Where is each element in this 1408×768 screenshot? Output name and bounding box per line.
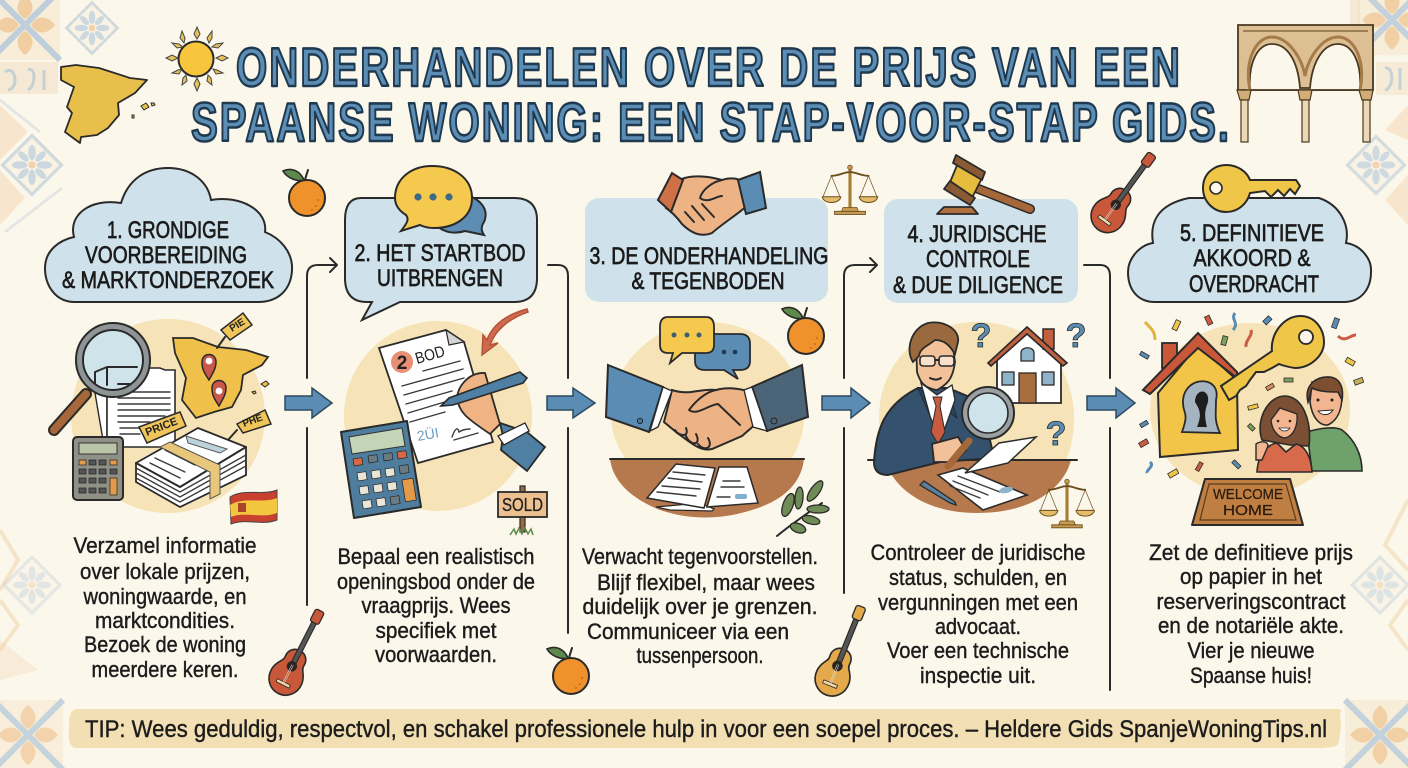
illustration: market research (54, 313, 277, 524)
offer document: 2ÜI (416, 423, 440, 444)
text: step 5 description: Vier je nieuwe (1188, 638, 1314, 663)
big key (1221, 316, 1324, 400)
handshake main (606, 365, 808, 450)
arrow connector 4 to 5 (1084, 265, 1110, 690)
cloud heading 5: OVERDRACHT (1189, 271, 1319, 298)
text: step 5 description: Zet de definitieve prijs (1149, 540, 1353, 565)
welcome mat: HOME (1223, 502, 1273, 519)
text: step 4 description: Voer een technische (887, 638, 1069, 663)
document on table (938, 468, 1027, 510)
text: step 4 description: advocaat. (935, 614, 1021, 639)
yellow house (1143, 333, 1238, 457)
arrow connector 3 to 4 (844, 258, 877, 593)
confetti (1139, 313, 1364, 478)
map with pins (173, 338, 269, 418)
icon: scales small (1040, 479, 1094, 528)
icon: orange 3 (547, 647, 589, 694)
price tags: PIE (228, 316, 248, 335)
panel: step 1 (45, 168, 292, 524)
text: step 4 description: Controleer de juridische (870, 540, 1086, 565)
question marks: ? (1046, 415, 1066, 453)
icon: guitar middle (810, 600, 877, 701)
icon: chat bubbles (395, 166, 486, 235)
icon: Spanish flag (230, 490, 277, 524)
text: step 1 description: Bezoek de woning (84, 632, 246, 657)
text: step 2 description (337, 544, 535, 667)
price tags: PRICE (144, 416, 179, 439)
title: ONDERHANDELEN OVER DE PRIJS VAN EEN (236, 37, 1180, 99)
text: step 1 description: over lokale prijzen, (80, 559, 250, 584)
text: step 5 description: reserveringscontract (1156, 589, 1346, 614)
illustration: lawyer checking (868, 322, 1077, 513)
text: step 3 description (582, 544, 818, 668)
text: step 2 description: voorwaarden. (375, 642, 497, 667)
heading block 4: CONTROLE (926, 246, 1030, 273)
cloud heading 1: & MARKTONDERZOEK (62, 267, 274, 294)
pen (920, 481, 956, 505)
tile decoration left (0, 0, 117, 768)
text: step 4 description: status, schulden, en (889, 565, 1067, 590)
text: step 4 description: vergunningen met een (878, 590, 1078, 615)
offer document: BOD (413, 343, 447, 368)
icon: Moorish arch (1237, 25, 1373, 142)
cloud heading 5: 5. DEFINITIEVE (1180, 220, 1324, 247)
cloud heading 5 (1128, 198, 1371, 302)
icon: gavel (937, 155, 1030, 214)
panel: step 4 (868, 155, 1094, 528)
tile decoration right (1345, 0, 1408, 768)
icon: map of Spain (61, 65, 155, 143)
icon: orange 1 (283, 169, 325, 216)
heading block 3: & TEGENBODEN (632, 268, 784, 295)
offer document (379, 330, 493, 463)
held paper (965, 437, 1036, 473)
sold sign (498, 486, 547, 535)
icon: olive branch (777, 479, 829, 536)
illustration: writing the offer (341, 309, 547, 535)
tip bar (69, 709, 1341, 748)
icon: key top (1203, 165, 1300, 212)
text: step 5 description (1149, 540, 1353, 688)
text: step 4 description: inspectie uit. (920, 663, 1036, 688)
speech bubble heading 2: 2. HET STARTBOD (354, 240, 526, 267)
stack of papers (136, 428, 246, 507)
question marks: ? (971, 317, 991, 355)
text: step 1 description: woningwaarde, en (83, 584, 246, 609)
arrow 1 (285, 388, 332, 418)
text: step 3 description: Verwacht tegenvoorstellen. (582, 544, 818, 569)
text: step 2 description: openingsbod onder de (337, 569, 535, 594)
icon: guitar bottom left (263, 603, 335, 701)
text: step 3 description: duidelijk over je grenzen. (582, 594, 818, 619)
couple (1256, 377, 1362, 472)
icon: scales top (822, 165, 878, 214)
text: step 2 description: Bepaal een realistisch (338, 544, 534, 569)
question marks (971, 317, 1086, 453)
icon: orange 2 (782, 307, 824, 354)
calculator blue (341, 421, 421, 518)
offer document: 2 (397, 353, 407, 374)
text: step 1 description: Verzamel informatie (74, 533, 256, 558)
text: step 4 description (870, 540, 1086, 688)
title (191, 37, 1229, 154)
sold sign: SOLD (502, 495, 543, 515)
icon: handshake top (658, 172, 766, 235)
speech bubble heading 2 (345, 198, 537, 320)
arrow 4 (1087, 388, 1135, 418)
cloud heading 1: VOORBEREIDING (85, 242, 247, 269)
contract papers (647, 464, 758, 511)
tip bar: TIP: Wees geduldig, respectvol, en schakel professionele hulp in voor een soepel proces. – Heldere Gids SpanjeWoningTips.nl (85, 716, 1327, 743)
cloud heading 1 (45, 168, 292, 302)
panel: step 2 (341, 166, 547, 535)
text: step 5 description: op papier in het (1180, 564, 1322, 589)
documents (95, 368, 175, 447)
heading block 3 (585, 198, 828, 302)
text: step 3 description: Blijf flexibel, maar wees (597, 570, 815, 595)
icon: guitar top (1084, 144, 1166, 239)
magnifier (54, 323, 150, 430)
arrow connector 1 to 2 (307, 258, 337, 605)
heading block 4: 4. JURIDISCHE (908, 221, 1046, 248)
arrow 2 (547, 388, 595, 418)
cloud heading 1: 1. GRONDIGE (107, 217, 229, 244)
cloud heading 5: AKKOORD & (1194, 245, 1310, 272)
chat bubbles (660, 317, 750, 379)
illustration: key and new owners (1143, 316, 1362, 525)
arrow connector 2 to 3 (548, 265, 568, 633)
price tags (139, 313, 271, 443)
text: step 5 description: Spaanse huis! (1190, 663, 1312, 688)
table (868, 460, 1077, 513)
icon: sun (166, 27, 228, 91)
house (988, 327, 1067, 403)
question marks: ? (1066, 317, 1086, 355)
panel: step 3 (585, 172, 829, 536)
price tags: PHE (241, 412, 265, 430)
text: step 1 description (74, 533, 256, 682)
arrow 3 (822, 388, 870, 418)
title: SPAANSE WONING: EEN STAP-VOOR-STAP GIDS. (191, 92, 1229, 154)
hand with pen (441, 372, 545, 471)
text: step 5 description: en de notariële akte. (1158, 613, 1344, 638)
welcome mat (1192, 479, 1303, 525)
text: step 2 description: vraagprijs. Wees (362, 593, 510, 618)
red arrow (482, 309, 528, 355)
text: step 1 description: meerdere keren. (92, 657, 238, 682)
heading block 3: 3. DE ONDERHANDELING (590, 243, 828, 270)
panel: step 5 (1128, 165, 1371, 525)
magnifier (948, 387, 1014, 466)
text: step 3 description: tussenpersoon. (636, 643, 764, 668)
illustration: handshake over contract (606, 317, 808, 518)
heading block 4: & DUE DILIGENCE (893, 272, 1063, 299)
calculator (73, 437, 123, 500)
text: step 2 description: specifiek met (376, 618, 496, 643)
text: step 1 description: marktcondities. (95, 608, 235, 633)
table (610, 458, 804, 518)
welcome mat: WELCOME (1213, 486, 1283, 503)
speech bubble heading 2: UITBRENGEN (377, 265, 503, 292)
heading block 4 (884, 199, 1078, 303)
text: step 3 description: Communiceer via een (587, 619, 789, 644)
lawyer (874, 322, 994, 475)
